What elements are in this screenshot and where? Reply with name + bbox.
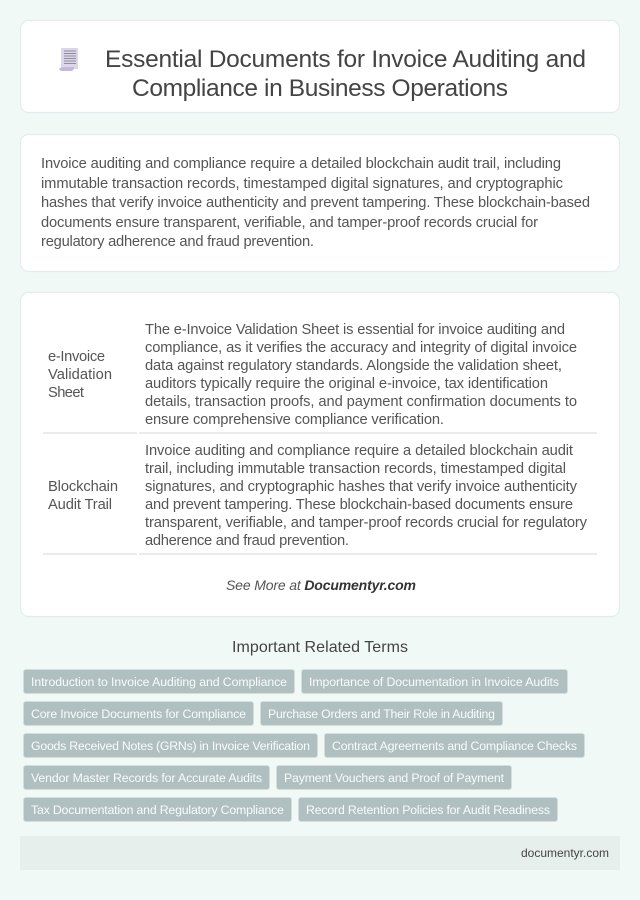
tag: [24, 798, 292, 822]
tag: [324, 734, 584, 758]
tag: [24, 766, 270, 790]
tag: [24, 702, 254, 726]
row label: Blockchain: [48, 479, 118, 495]
tag: Payment Vouchers and Proof of Payment: [284, 771, 505, 785]
icon: document: [59, 48, 78, 71]
row label: Audit Trail: [48, 497, 112, 513]
row description: auditors typically require the original e-invoice, tax identification: [145, 376, 548, 392]
summary text: documents ensure transparent, verifiable, and tamper-proof records crucial for: [41, 215, 538, 231]
tag: Goods Received Notes (GRNs) in Invoice Verification: [31, 739, 310, 753]
row description: compliance, as it verifies the accuracy and integrity of digital invoice: [145, 340, 577, 356]
title: Essential Documents for Invoice Auditing and: [105, 46, 586, 73]
tag: Tax Documentation and Regulatory Compliance: [31, 803, 284, 817]
tag: Introduction to Invoice Auditing and Compliance: [31, 675, 287, 689]
summary text: Invoice auditing and compliance require a detailed blockchain audit trail, including: [41, 156, 561, 172]
row label: [48, 349, 112, 401]
tag: Vendor Master Records for Accurate Audits: [31, 771, 262, 785]
tag: [260, 702, 502, 726]
tag: Record Retention Policies for Audit Readiness: [306, 803, 550, 817]
related terms tags: [24, 670, 584, 822]
summary text: regulatory adherence and fraud prevention.: [41, 234, 314, 250]
tag: [298, 798, 558, 822]
row description: adherence and fraud prevention.: [145, 533, 349, 549]
footer: [20, 836, 620, 870]
panel: summary card: [20, 134, 620, 272]
row label: [48, 479, 118, 513]
row description: signatures, and cryptographic hashes that verify invoice authenticity: [145, 479, 578, 495]
row: Blockchain Audit Trail: [48, 443, 588, 549]
tag: [24, 734, 318, 758]
heading: important related terms: Important Related Terms: [232, 639, 408, 656]
summary text: immutable transaction records, timestamped digital signatures, and cryptographic: [41, 176, 563, 192]
summary text: hashes that verify invoice authenticity and prevent tampering. These blockchain-based: [41, 195, 590, 211]
summary text: [41, 156, 590, 250]
title: Compliance in Business Operations: [132, 75, 508, 102]
see more link: See More at Documentyr.com: [226, 577, 416, 593]
row label: Sheet: [48, 385, 84, 401]
row description: and prevent tampering. These blockchain-based documents ensure: [145, 497, 573, 513]
title: [105, 46, 586, 102]
tag: [302, 670, 568, 694]
row description: trail, including immutable transaction records, timestamped digital: [145, 461, 566, 477]
tag: Core Invoice Documents for Compliance: [31, 707, 246, 721]
tag: [276, 766, 512, 790]
row: e-Invoice Validation Sheet: [48, 322, 577, 428]
row description: ensure comprehensive compliance verification.: [145, 412, 444, 428]
tag: Contract Agreements and Compliance Checks: [332, 739, 577, 753]
row description: data against regulatory standards. Alongside the validation sheet,: [145, 358, 562, 374]
row description: The e-Invoice Validation Sheet is essential for invoice auditing and: [145, 322, 565, 338]
footer link text: documentyr.com: [521, 846, 609, 860]
tag: [24, 670, 294, 694]
row description: details, transaction proofs, and payment confirmation documents to: [145, 394, 577, 410]
row description: [145, 322, 577, 428]
row description: Invoice auditing and compliance require a detailed blockchain audit: [145, 443, 573, 459]
row description: [145, 443, 588, 549]
panel: documents table card: [20, 292, 620, 616]
tag: Importance of Documentation in Invoice Audits: [309, 675, 559, 689]
panel: title card: [20, 20, 620, 112]
row label: e-Invoice: [48, 349, 105, 365]
tag: Purchase Orders and Their Role in Auditing: [268, 707, 495, 721]
row label: Validation: [48, 367, 112, 383]
row description: transparent, verifiable, and tamper-proof records crucial for regulatory: [145, 515, 588, 531]
